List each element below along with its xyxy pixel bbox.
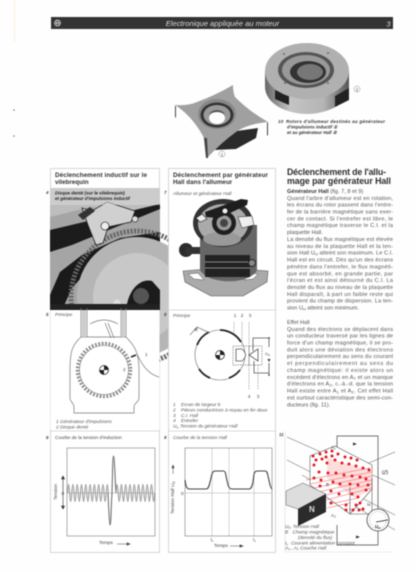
photo: distributor and Hall generator [172, 191, 268, 296]
diagram: principle 5: 1 [145, 352, 148, 357]
text block: Hall effect: et un manque [356, 375, 393, 381]
text block: Hall effect: duit alors une déviation des électrons [287, 347, 393, 353]
axis label: time: t [210, 537, 212, 542]
text block: Hall generator: Hall est en circuit. Dès qu'un des écrans [287, 258, 393, 264]
header bar: Electronique appliquée au moteur [166, 19, 280, 28]
axis label: voltage: Tension [53, 483, 58, 500]
axis label: voltage [53, 476, 64, 509]
photo: toothed disc and pulse generator [50, 188, 203, 363]
text block: Hall generator: sion Hall U [287, 251, 315, 257]
axis label: time: t [253, 537, 254, 542]
panel: Hall effect figure 11: B [326, 482, 329, 487]
legend: A₁...A₂ Couche Hall [284, 546, 327, 552]
text block: Hall effect: ducteurs (fig. 11). [287, 402, 331, 408]
chart: Hall voltage curve: Courbe de la tension Hall [173, 435, 228, 441]
photo: toothed disc and pulse generator: Disque denté (sur le vilebrequin) [55, 190, 125, 196]
diagram: principle 8: 3 [257, 394, 260, 399]
axis label: time: Temps [214, 543, 228, 548]
diagram: principle 5: Principe [55, 312, 73, 318]
legend: H [288, 526, 291, 530]
diagram: principle 8: 4 [173, 418, 176, 424]
text block: Hall generator: au niveau de la plaquette Hall et la ten- [287, 244, 393, 250]
heading: Hall: Hall dans l'allumeur [173, 179, 233, 186]
text block: Hall generator: sion U [287, 306, 303, 312]
text block: Hall generator: champ magnétique traverse le C.I. et la [287, 223, 394, 229]
figure numbers: 8 [164, 312, 167, 317]
diagram: principle 8: 1 [173, 402, 176, 408]
photo: Hall generator rotor [265, 43, 349, 114]
panel: Hall effect figure 11 [284, 431, 395, 552]
heading: inductive: Déclenchement inductif sur le [55, 172, 147, 179]
text block: Hall generator: fer de la barrière magnétique sans exer- [287, 210, 393, 216]
panel: Hall trigger column [168, 168, 276, 552]
text block: Hall effect: Effet Hall [287, 320, 310, 326]
heading: main article: mage par générateur Hall [287, 176, 391, 186]
label: circled 2 [354, 86, 360, 92]
text block: Hall generator: provient du champ de dispersion. La ten- [287, 299, 393, 305]
axis label: voltage: 0 [62, 491, 64, 496]
legend: Courant alimentation constant [291, 540, 355, 546]
axis label: time: z [212, 539, 214, 543]
text block: Hall generator: cer de contact. Si l'entrefer est libre, le [287, 216, 393, 222]
gauge: U [375, 524, 378, 529]
diagram: principle 8: C.I. Hall [181, 413, 199, 419]
header bar: 3 [386, 20, 391, 28]
axis label: Hall voltage [170, 465, 184, 514]
photo: distributor and Hall generator: Allumeur et générateur Hall [172, 191, 232, 197]
photo: inductive generator rotor [175, 85, 268, 158]
text block: Hall generator: Hall disparaît, à part un faible reste qui [287, 292, 393, 298]
label: circled 2: 2 [356, 87, 359, 92]
axis label: time: Temps [99, 540, 113, 545]
text block: Hall effect: champ magnétique: il existe alors un [287, 368, 393, 374]
text block: Hall generator: Générateur Hall (fig. 7, 8 et 9) [287, 189, 363, 195]
diagram: principle 8: b [194, 327, 199, 332]
icon: shaft symbol [100, 366, 108, 374]
legend: I [285, 542, 286, 546]
gauge [367, 509, 389, 531]
heading: inductive: vilebrequin [55, 179, 89, 186]
figure numbers: 11 [279, 432, 284, 437]
axis label: time: z [254, 539, 256, 543]
heading: Hall: Déclenchement par générateur [173, 172, 269, 179]
legend: Tension Hall [293, 524, 320, 530]
text block: Hall effect: , c.-à.-d. que la tension [332, 382, 393, 388]
panel: Hall effect figure 11: Iv [367, 502, 371, 507]
diagram: principle 8: Entrefer [181, 418, 198, 424]
axis label: Hall voltage: 0 [181, 491, 184, 496]
diagram: principle 5: 2 [123, 367, 126, 372]
text block: Hall generator: densité du flux au niveau de la plaquette [287, 285, 393, 291]
figure numbers: 9 [164, 435, 167, 440]
diagram: principle 8: G [268, 353, 271, 357]
text block: Hall generator: pénètre dans l'entrefer, le flux magnéti- [287, 264, 393, 270]
figure numbers: 5 [46, 312, 49, 317]
axis label: Hall voltage: Tension Hall U [170, 484, 175, 514]
caption: figure 10: et au générateur Hall ② [287, 130, 338, 135]
text block: Hall effect: 1 [354, 376, 357, 381]
label: circled 1: 1 [221, 152, 224, 157]
text block: Hall generator: que est absorbé, en grande partie, par [287, 271, 393, 277]
header bar [51, 17, 393, 29]
electrons [312, 450, 370, 512]
text block: Hall effect: . Cet effet Hall [354, 388, 393, 394]
diagram: principle 8: G [176, 425, 179, 429]
text block: Hall effect: est surtout caractéristique des semi-con- [287, 395, 393, 401]
panel: Hall effect figure 11: A₁ [331, 445, 336, 450]
text block: Hall effect: Quand des électrons se déplacent dans [287, 327, 393, 333]
diagram: principle 8: 2 [172, 408, 176, 414]
legend: B Champ magnétique [285, 530, 335, 536]
figure numbers: 6 [46, 435, 49, 440]
label: circled 1 [219, 151, 225, 157]
text block: Hall generator: La densité du flux magnétique est élevée [287, 237, 393, 243]
text block: Hall effect: et A [339, 388, 352, 394]
text block: Hall generator: H [315, 252, 318, 256]
margin marks [13, 0, 15, 137]
text block: Hall generator: plaquette Hall. [287, 230, 323, 236]
text block: Hall generator [287, 189, 394, 312]
diagram: principle 8: U [265, 351, 268, 356]
text block: Hall effect: 2 [352, 389, 355, 394]
text block: Hall effect: 1 [337, 389, 340, 394]
axis label: Hall voltage: G [172, 481, 176, 484]
Hall plate with magnetic field hatching [306, 446, 372, 514]
gauge: H [378, 526, 380, 530]
diagram: principle 8: 2 [241, 313, 244, 318]
text block: Hall generator: l'écran et est ainsi détourné du C.I. La [287, 278, 394, 284]
figure numbers: 7 [164, 190, 167, 195]
diagram: principle 5: 2 Disque denté [55, 424, 89, 430]
magnet N: N [309, 505, 315, 514]
diagram: principle 8: Tension du générateur Hall [180, 424, 238, 430]
photo: toothed disc and pulse generator: et générateur d'impulsions inductif [55, 196, 130, 201]
text block: Hall effect: d'électrons en A [287, 382, 329, 388]
legend: (densité du flux) [298, 535, 333, 541]
text block: Hall generator: H [303, 306, 306, 311]
text block: Hall effect: Hall existe entre A [287, 388, 336, 394]
diagram: principle 8: Pièces conductrices à noyau en fer doux [181, 408, 268, 414]
diagram: principle 8: Ecran de largeur b [181, 402, 221, 408]
diagram: principle 8: 3 [249, 313, 252, 318]
diagram: principle 8: U [173, 424, 176, 430]
text block: Hall effect: 2 [329, 382, 332, 388]
chart: Hall voltage curve [168, 431, 276, 548]
chart: induction voltage curve [50, 431, 160, 545]
caption: figure 10: d'impulsions inductif ① [287, 124, 338, 130]
legend [284, 524, 355, 552]
legend: U [285, 525, 288, 530]
diagram: principle 8: Principe [173, 313, 191, 319]
text block: Hall generator: Quand l'arbre d'allumeur est en rotation, [287, 196, 393, 202]
diagram: principle 8: 1 [234, 313, 237, 318]
chart: induction voltage curve: Courbe de la tension d'induction [55, 435, 122, 440]
diagram: principle 5 [50, 304, 160, 430]
heading: main article: Déclenchement de l'allu- [287, 167, 386, 177]
caption: figure 10: 10 Rotors d'allumeur destinés au générateur [278, 119, 385, 124]
caption: figure 10 [278, 119, 385, 135]
panel: Hall effect figure 11: A₂ [331, 513, 336, 518]
text block: Hall generator: les écrans du rotor passent dans l'entre- [287, 203, 393, 209]
text block: Hall generator: atteint son minimum. [306, 306, 359, 312]
text block: Hall generator: atteint son maximum. Le C.I. [318, 251, 393, 257]
diagram: principle 8: 3 [173, 413, 176, 419]
text block: Hall effect: et perpendiculairement au sens du [287, 361, 393, 367]
legend: v [286, 542, 288, 546]
magnet S: S [381, 469, 390, 475]
figure numbers [45, 190, 284, 440]
text block: Hall effect: force d'un champ magnétique, il se pro- [287, 340, 393, 346]
icon: shaft symbol [216, 350, 224, 360]
text block: Hall effect: un conducteur traversé par les lignes de [287, 334, 393, 340]
panel: inductive trigger column [50, 168, 203, 552]
text block: Hall effect [287, 320, 393, 408]
text block: Hall effect: perpendiculairement au sens du courant [287, 354, 393, 360]
diagram: principle 5: 1 Générateur d'impulsions [56, 419, 112, 425]
text block: Hall effect: excédent d'électrons en A [287, 375, 353, 381]
panel: Hall effect figure 11: I· [349, 507, 352, 512]
axis label: time [210, 537, 256, 548]
diagram: principle 8: 4 [248, 394, 251, 399]
icon: Bosch logo [54, 20, 60, 26]
diagram: principle 8 [168, 310, 276, 430]
figure numbers: 4 [45, 190, 49, 195]
